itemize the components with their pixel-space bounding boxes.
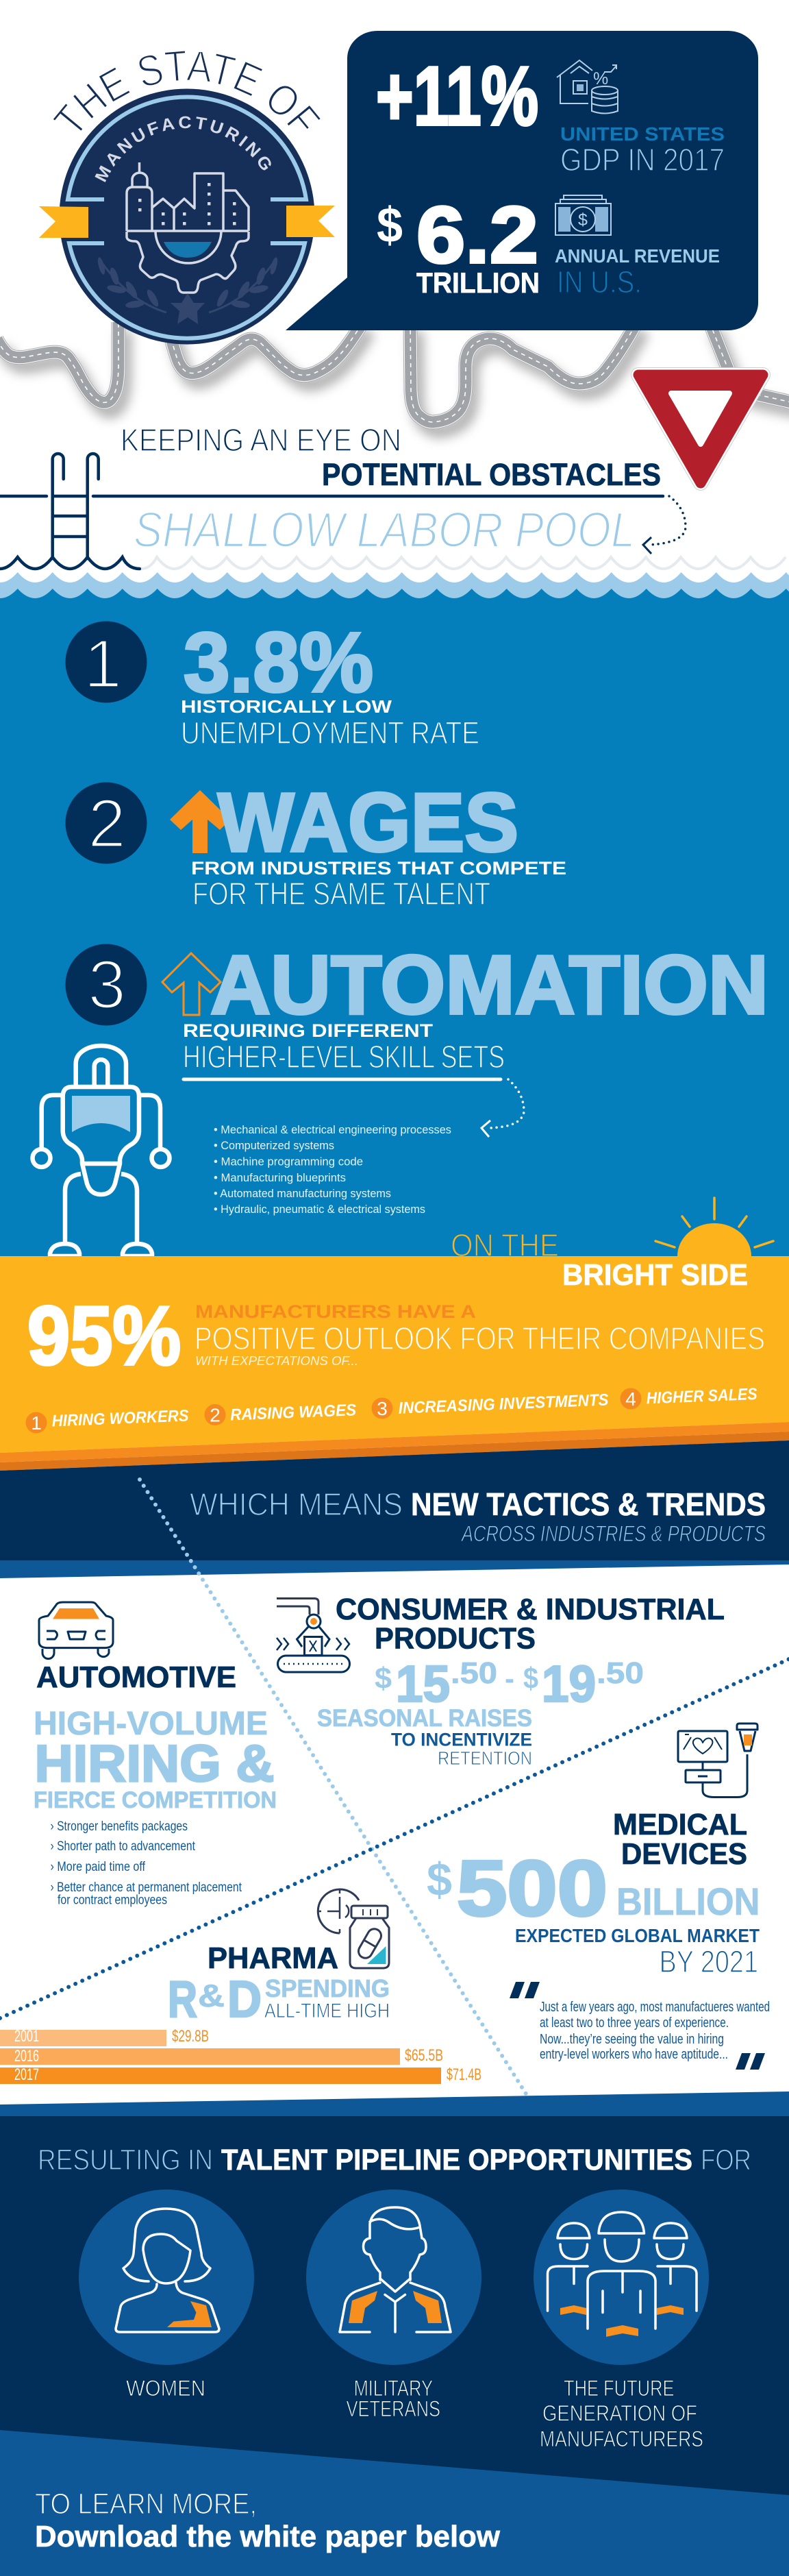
icon: clock and pill bottle (317, 1889, 389, 1968)
bar chart: pharma r and d spending: $71.4B (447, 2065, 481, 2084)
expectation 1: hiring workers: HIRING WORKERS (51, 1406, 189, 1430)
quote text: entry-level workers who have aptitude... (540, 2047, 728, 2062)
stat: 3.8 percent: 3.8% (184, 616, 373, 710)
list: automotive tactics: › Better chance at permanent placement (51, 1880, 242, 1895)
label: seasonal raises: SEASONAL RAISES (317, 1705, 532, 1732)
icon: veteran (306, 2189, 481, 2365)
number 3 (66, 944, 147, 1025)
panel: consumer and industrial products (277, 1593, 725, 1769)
stat: seasonal raise range: .50 (451, 1656, 497, 1690)
label: future generation: THE FUTURE (564, 2376, 674, 2401)
label: future generation: MANUFACTURERS (540, 2427, 703, 2451)
badge ribbon right (286, 206, 335, 237)
arrow: dotted to shallow labor pool (643, 496, 686, 554)
stat: 500 billion: 500 (457, 1845, 608, 1933)
label: annual revenue: ANNUAL REVENUE (555, 245, 720, 267)
list: automotive tactics: › More paid time off (51, 1860, 146, 1874)
icon: money stack: $ (578, 210, 588, 230)
panel: automotive (34, 1602, 277, 1908)
panel background (0, 598, 789, 1257)
list: skills: • Computerized systems (214, 1139, 334, 1152)
quote mark open (510, 1982, 540, 1998)
icon: woman (79, 2189, 254, 2365)
band lower edge (0, 1560, 789, 1578)
number 3: 3 (88, 946, 126, 1023)
heading: devices: DEVICES (621, 1837, 747, 1871)
water waves (0, 572, 789, 610)
icon: conveyor robot (277, 1598, 349, 1672)
text: to learn more: TO LEARN MORE, (35, 2488, 257, 2520)
arrow: dotted to skill list (184, 1079, 524, 1137)
stat: 6.2 trillion (377, 190, 540, 299)
stat: seasonal raise range (375, 1655, 644, 1713)
bar chart: pharma r and d spending (0, 2027, 481, 2084)
panel: call to action (0, 2430, 789, 2576)
label: women: WOMEN (126, 2376, 205, 2401)
heading: automotive: AUTOMOTIVE (36, 1660, 236, 1694)
title: spending: SPENDING (265, 1974, 390, 2002)
icon: sun (655, 1198, 773, 1289)
title: fierce competition: FIERCE COMPETITION (34, 1787, 277, 1813)
stat: seasonal raise range: .50 (597, 1656, 644, 1690)
stat: seasonal raise range: - (505, 1662, 514, 1695)
expectation 4: higher sales: 4 (625, 1388, 636, 1410)
icon: future workers (534, 2189, 709, 2365)
expectation 1: hiring workers: 1 (31, 1412, 42, 1434)
heading: automation: AUTOMATION (210, 938, 768, 1031)
list: skills: • Manufacturing blueprints (214, 1171, 346, 1184)
title: r and d: R (168, 1970, 197, 2028)
list: skills: • Machine programming code (214, 1155, 363, 1168)
heading: pharma: PHARMA (208, 1941, 338, 1975)
title: high-volume: HIGH-VOLUME (34, 1706, 268, 1742)
expectation 2: raising wages: 2 (210, 1405, 221, 1425)
expectation 4: higher sales: HIGHER SALES (646, 1385, 757, 1408)
expectation 3: increasing investments: 3 (377, 1398, 388, 1419)
label: with expectations: WITH EXPECTATIONS OF... (195, 1354, 358, 1368)
icon: robot (33, 1046, 170, 1256)
icon: money stack (555, 195, 611, 235)
bar chart: pharma r and d spending: 2001 (14, 2027, 39, 2046)
quote text (540, 2000, 770, 2062)
stat: seasonal raise range: 19 (542, 1655, 596, 1713)
panel: medical devices (427, 1724, 770, 2070)
bar chart: pharma r and d spending: 2017 (14, 2065, 39, 2084)
panel background (0, 2430, 789, 2576)
panel: new tactics band (0, 1440, 789, 1578)
expectation 1: hiring workers (26, 1406, 189, 1434)
icon: solid up arrow (170, 790, 230, 853)
stat: 500 billion: BILLION (616, 1880, 760, 1923)
pool surface line (141, 557, 786, 569)
label: by 2021: BY 2021 (659, 1944, 758, 1979)
title: all-time high: ALL-TIME HIGH (264, 2000, 390, 2022)
title: r and d (168, 1970, 262, 2028)
label: gdp in 2017: GDP IN 2017 (560, 142, 725, 177)
number 2: 2 (88, 785, 126, 862)
label: military veterans (347, 2376, 440, 2421)
heading: keeping an eye on: KEEPING AN EYE ON (121, 422, 401, 458)
panel background (0, 2116, 789, 2576)
heading: shallow labor pool: SHALLOW LABOR POOL (134, 503, 635, 558)
list: skills: • Hydraulic, pneumatic & electrical systems (214, 1203, 425, 1216)
top edge (0, 2092, 789, 2116)
label: higher-level skill sets: HIGHER-LEVEL SKILL SETS (183, 1039, 505, 1075)
bar chart: pharma r and d spending: $29.8B (172, 2027, 209, 2046)
stat: plus 11 percent: +11% (376, 49, 538, 143)
panel background (0, 1256, 789, 1453)
text: download white paper: Download the white paper below (35, 2520, 501, 2553)
badge disc (59, 89, 315, 344)
icon: yield sign (638, 375, 763, 483)
icon: house and coins: % (593, 69, 608, 88)
quote text: Now...they’re seeing the value in hiring (540, 2032, 724, 2047)
expectation 3: increasing investments: INCREASING INVESTMENTS (398, 1390, 609, 1418)
badge: the state of manufacturing (39, 51, 335, 344)
panel: pharma (0, 1889, 481, 2084)
stat: 6.2 trillion: $ (377, 198, 403, 253)
stat: 500 billion (427, 1845, 760, 1933)
badge manufacturing arc: MANUFACTURING (95, 116, 271, 182)
dotted divider: diagonal (0, 1659, 789, 2018)
list: skills: • Automated manufacturing systems (214, 1187, 391, 1200)
bar chart: pharma r and d spending: $65.5B (405, 2046, 443, 2065)
icon: car (39, 1602, 113, 1658)
label: unemployment rate: UNEMPLOYMENT RATE (181, 715, 479, 750)
icon: pool ladder and line (0, 454, 663, 569)
heading: potential obstacles: POTENTIAL OBSTACLES (322, 457, 661, 492)
stat: seasonal raise range: $ (375, 1662, 392, 1695)
dark orange edge (0, 1432, 789, 1471)
panel: shallow labor pool reasons (0, 598, 789, 1289)
icon: ultrasound machine (678, 1724, 757, 1797)
label: manufacturers have a: MANUFACTURERS HAVE A (195, 1301, 476, 1322)
label: historically low: HISTORICALLY LOW (181, 696, 392, 717)
badge title arc: THE STATE OF (53, 51, 321, 130)
title: hiring and: HIRING & (34, 1735, 274, 1793)
list: automotive tactics: › Shorter path to advancement (51, 1839, 196, 1854)
label: retention: RETENTION (438, 1747, 532, 1769)
quote mark close (736, 2053, 765, 2070)
title: r and d: & (198, 1978, 225, 2013)
band background (0, 1440, 789, 1560)
expectation 4: higher sales (621, 1385, 757, 1410)
heading: consumer and industrial: CONSUMER & INDUSTRIAL (336, 1593, 725, 1626)
list: skills: • Mechanical & electrical engineering processes (214, 1123, 451, 1136)
heading: products: PRODUCTS (375, 1622, 536, 1656)
label: requiring different: REQUIRING DIFFERENT (183, 1020, 434, 1041)
heading: talent pipeline opportunities: FOR (701, 2144, 751, 2176)
panel: headline stats (286, 31, 758, 330)
label: to incentivize: TO INCENTIVIZE (391, 1730, 532, 1750)
label: future generation (540, 2376, 703, 2451)
list: skills (214, 1123, 451, 1216)
stat: 6.2 trillion: 6.2 (416, 190, 538, 280)
label: united states: UNITED STATES (560, 123, 725, 145)
bar chart: pharma r and d spending: 2016 (14, 2047, 39, 2065)
heading: medical: MEDICAL (613, 1808, 747, 1841)
icon: city and gear (127, 162, 249, 293)
heading: talent pipeline opportunities: TALENT PIPELINE OPPORTUNITIES (221, 2144, 692, 2176)
label: military veterans: MILITARY (353, 2376, 433, 2401)
label: future generation: GENERATION OF (542, 2401, 697, 2426)
heading: which means: WHICH MEANS (190, 1486, 403, 1522)
label: military veterans: VETERANS (347, 2396, 440, 2421)
panel background (286, 31, 758, 330)
title: r and d: D (227, 1970, 262, 2028)
dotted divider: steep (140, 1480, 527, 2095)
expectation 2: raising wages: RAISING WAGES (230, 1401, 357, 1425)
label: in u.s.: IN U.S. (557, 265, 642, 299)
heading: bright side: BRIGHT SIDE (562, 1258, 748, 1292)
number 1 (66, 621, 147, 703)
list: automotive tactics: › Stronger benefits packages (51, 1819, 188, 1834)
heading: wages: WAGES (218, 776, 518, 869)
icon: outline up arrow (162, 953, 221, 1015)
badge ring (68, 97, 306, 339)
stat: 500 billion: $ (427, 1854, 452, 1906)
icon: house and coins (557, 60, 618, 114)
number 1: 1 (84, 626, 122, 702)
number 2 (66, 783, 147, 863)
panel: talent pipeline (0, 2092, 789, 2576)
quote text: at least two to three years of experience. (540, 2015, 729, 2031)
list: automotive tactics: for contract employees (58, 1893, 167, 1908)
stat: 95 percent: 95% (27, 1289, 181, 1382)
winding road (0, 322, 789, 422)
heading: talent pipeline opportunities: RESULTING IN (38, 2144, 213, 2176)
heading: new tactics and trends: NEW TACTICS & TRENDS (411, 1486, 766, 1522)
label: from industries: FROM INDUSTRIES THAT COMPETE (191, 858, 566, 879)
list: automotive tactics (51, 1819, 242, 1908)
stat: 6.2 trillion: TRILLION (416, 267, 540, 299)
badge ribbon left (39, 206, 88, 238)
stat: seasonal raise range: $ (523, 1662, 538, 1695)
panel: bright side (0, 1256, 789, 1471)
stat: seasonal raise range: 15 (396, 1655, 450, 1713)
label: expected global market: EXPECTED GLOBAL MARKET (515, 1925, 760, 1946)
orange edge (0, 1422, 789, 1462)
icon: star and laurels (97, 256, 279, 324)
label: on the: ON THE (451, 1227, 559, 1263)
label: for the same talent: FOR THE SAME TALENT (192, 876, 490, 911)
